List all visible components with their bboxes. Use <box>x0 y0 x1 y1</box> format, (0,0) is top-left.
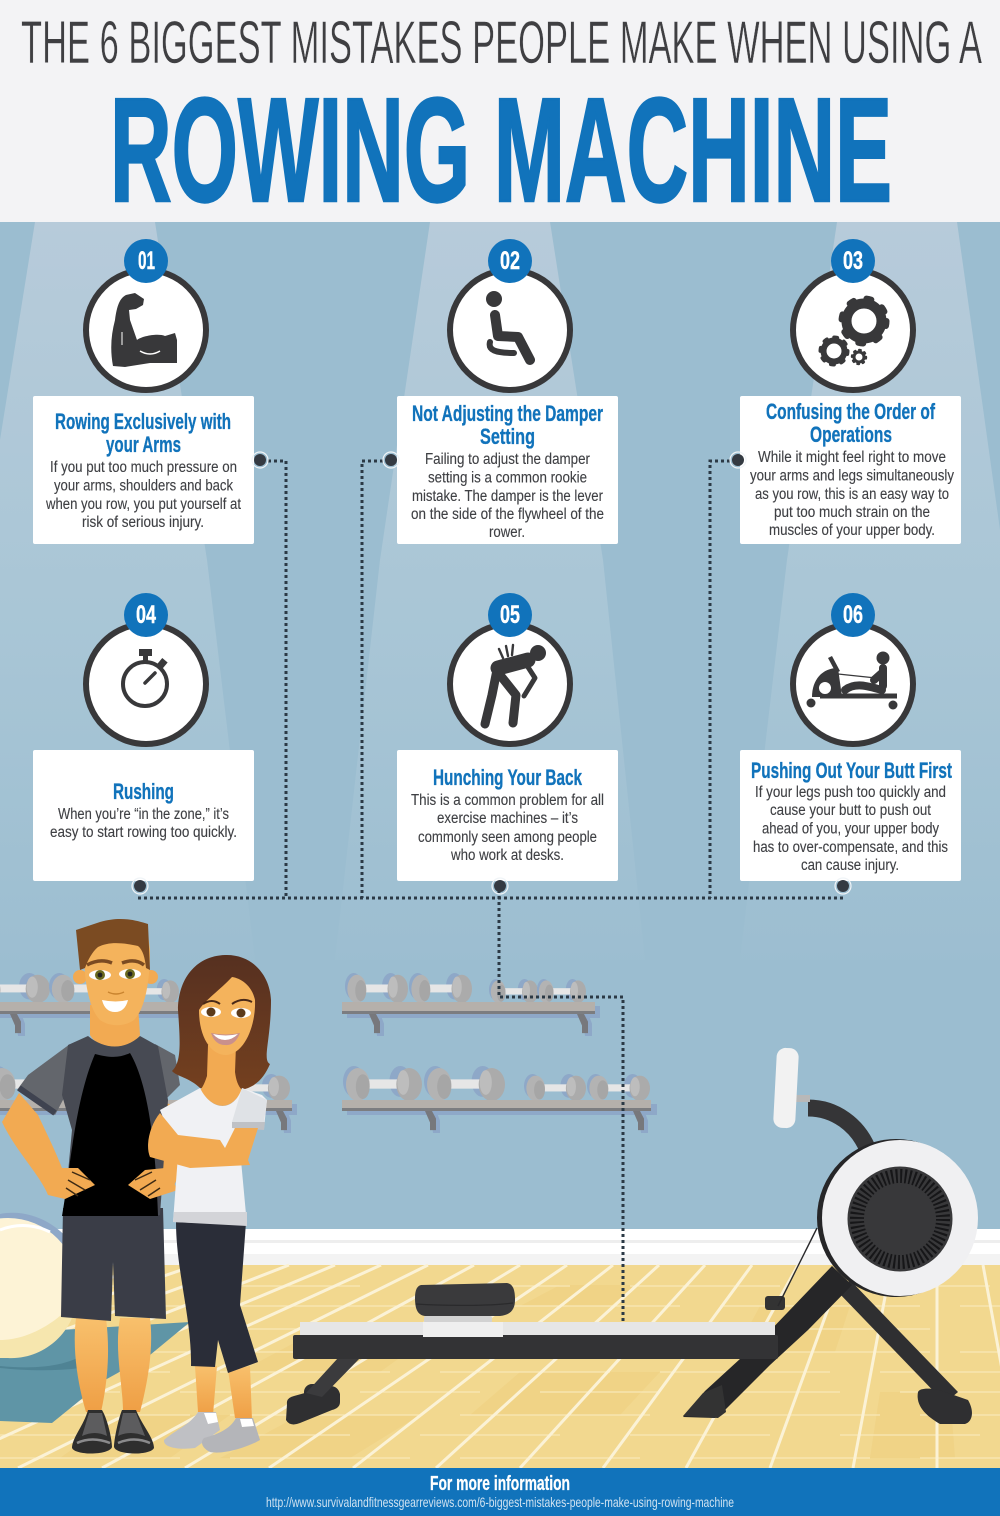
body 04: easy to start rowing too quickly. <box>50 824 237 841</box>
man: legs <box>75 1318 151 1412</box>
badge 05: 05 <box>500 601 520 629</box>
step 06 <box>740 593 961 894</box>
heading 01: Rowing Exclusively with <box>55 409 231 434</box>
heading 03 <box>766 399 935 447</box>
connector node 03 <box>730 452 746 468</box>
step 04 <box>33 593 254 894</box>
step 03 <box>730 239 961 544</box>
man: sleeves <box>17 1044 180 1115</box>
rail beam <box>293 1335 778 1359</box>
man: shorts <box>61 1208 166 1321</box>
badge 05 <box>488 593 532 637</box>
body 03 <box>750 449 954 539</box>
front strut <box>683 1266 852 1418</box>
body 01 <box>45 459 242 531</box>
body 05: exercise machines – it’s <box>437 810 578 827</box>
body 04 <box>50 806 237 841</box>
woman: face <box>199 977 255 1055</box>
woman: crossed arms <box>148 1113 258 1168</box>
connector node 04 <box>132 878 148 894</box>
heading 03: Operations <box>810 422 892 447</box>
monitor arm <box>808 1108 868 1150</box>
heading 02 <box>412 401 603 449</box>
seat carriage <box>423 1322 503 1337</box>
icon: seated person <box>486 291 530 360</box>
icon circle 06 <box>793 624 913 744</box>
body 05: commonly seen among people <box>418 829 597 846</box>
rack: lower left <box>0 1066 297 1133</box>
body 02: rower. <box>489 524 525 541</box>
badge 02 <box>488 239 532 283</box>
icon: gears <box>820 298 886 364</box>
icon circle 01 <box>86 270 206 390</box>
card 04 <box>33 750 254 881</box>
heading 05: Hunching Your Back <box>433 765 582 790</box>
dumbbell racks <box>0 973 657 1133</box>
wall background <box>0 222 1000 1232</box>
body 06 <box>753 784 948 874</box>
body 03: While it might feel right to move <box>758 449 946 466</box>
body 05: who work at desks. <box>450 847 564 864</box>
body 06: cause your butt to push out <box>770 802 932 819</box>
heading 01: your Arms <box>106 432 181 457</box>
silver rail <box>300 1322 775 1335</box>
card 06 <box>740 750 961 881</box>
badge 04 <box>124 593 168 637</box>
body 03: your arms and legs simultaneously <box>750 468 954 484</box>
icon: stopwatch <box>123 649 168 706</box>
flywheel <box>817 1139 978 1297</box>
footer url: http://www.survivalandfitnessgearreviews.com/6-biggest-mistakes-people-make-using-rowing-machine <box>266 1494 734 1510</box>
woman: top <box>160 1088 267 1226</box>
heading 02: Setting <box>480 424 535 449</box>
body 04: When you’re “in the zone,” it’s <box>58 806 229 823</box>
rack: upper centre <box>342 973 600 1036</box>
body 01: when you row, you put yourself at <box>45 496 242 513</box>
badge 03 <box>831 239 875 283</box>
spotlight beams <box>0 222 1000 960</box>
step 02 <box>383 239 618 544</box>
footer heading: For more information <box>430 1473 570 1495</box>
body 03: muscles of your upper body. <box>769 522 935 539</box>
icon: hunched person <box>485 645 546 724</box>
woman <box>148 955 271 1453</box>
woman: hair <box>172 955 271 1090</box>
rear strut <box>306 1358 360 1397</box>
woman: calves <box>195 1366 252 1420</box>
man: head <box>73 919 158 1025</box>
rowing machine <box>286 1047 978 1424</box>
woman: shoes <box>164 1412 260 1453</box>
icon: flexed arm <box>111 293 177 367</box>
icon circle 02 <box>450 270 570 390</box>
badge 02: 02 <box>500 247 520 275</box>
baseboard <box>0 1229 1000 1266</box>
man: neck <box>90 1005 140 1048</box>
man: shirt panels <box>62 1036 168 1215</box>
step 05 <box>397 593 618 894</box>
badge 01: 01 <box>138 247 155 275</box>
heading 01 <box>55 409 231 457</box>
woman: capri pants <box>176 1222 258 1373</box>
badge 03: 03 <box>843 247 863 275</box>
connector node 05 <box>492 878 508 894</box>
icon circle 04 <box>86 624 206 744</box>
body 02: mistake. The damper is the lever <box>412 488 603 505</box>
badge 06: 06 <box>843 601 863 629</box>
connector node 06 <box>835 878 851 894</box>
icon circle 05 <box>450 624 570 744</box>
rear foot <box>286 1384 340 1424</box>
body 03: put too much strain on the <box>774 504 930 521</box>
man: black shirt front <box>62 1053 158 1216</box>
body 02: Failing to adjust the damper <box>425 451 590 468</box>
rack: upper left <box>0 973 185 1036</box>
wooden floor <box>0 1265 1000 1468</box>
body 01: risk of serious injury. <box>82 514 204 531</box>
icon circle 03 <box>793 270 913 390</box>
card 01 <box>33 396 254 544</box>
front leg <box>838 1280 972 1424</box>
exercise ball and mat <box>0 1213 190 1423</box>
icon: rowing machine user <box>806 652 898 710</box>
card 02 <box>397 396 618 544</box>
heading 02: Not Adjusting the Damper <box>412 401 603 426</box>
footer band <box>0 1468 1000 1516</box>
seat <box>415 1283 515 1316</box>
connector node 02 <box>383 452 399 468</box>
badge 01 <box>124 239 168 283</box>
step 01 <box>33 239 268 544</box>
body 06: has to over-compensate, and this <box>753 839 948 856</box>
badge 06 <box>831 593 875 637</box>
monitor <box>773 1047 810 1129</box>
body 01: If you put too much pressure on <box>50 459 237 476</box>
card 05 <box>397 750 618 881</box>
body 06: can cause injury. <box>801 857 899 874</box>
rack: lower centre <box>342 1066 657 1133</box>
woman: neck <box>200 1045 242 1106</box>
body 03: as you row, this is an easy way to <box>755 486 949 503</box>
pull cord <box>778 1228 817 1306</box>
man: shoes <box>72 1410 154 1454</box>
seat rollers <box>424 1316 492 1323</box>
body 01: your arms, shoulders and back <box>54 478 233 494</box>
body 02 <box>411 451 604 541</box>
body 05: This is a common problem for all <box>411 792 604 809</box>
body 06: If your legs push too quickly and <box>755 784 946 801</box>
connector node 01 <box>252 452 268 468</box>
body 02: on the side of the flywheel of the <box>411 506 604 523</box>
body 05 <box>411 792 604 864</box>
connector lines <box>138 461 843 1327</box>
man <box>2 919 190 1454</box>
card 03 <box>740 396 961 544</box>
heading 04: Rushing <box>113 779 174 804</box>
man: left arm and hand <box>2 1093 178 1199</box>
body 06: ahead of you, your upper body <box>762 820 939 838</box>
man: right arm <box>150 1100 190 1190</box>
body 02: setting is a common rookie <box>428 470 587 486</box>
header band <box>0 0 1000 233</box>
badge 04: 04 <box>136 601 156 629</box>
